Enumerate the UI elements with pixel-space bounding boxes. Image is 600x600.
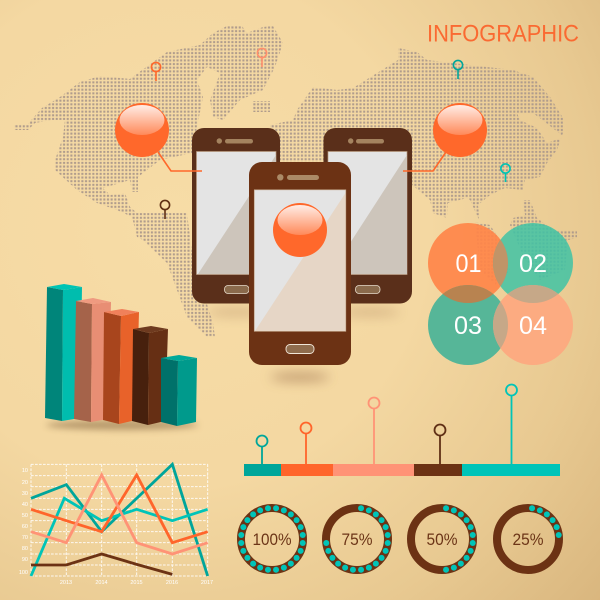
title: INFOGRAPHIC: [427, 20, 579, 48]
chart grid: [31, 464, 208, 576]
donut: 100%: [238, 505, 306, 573]
numbered circles: 01: [456, 250, 482, 278]
numbered circles: [428, 223, 573, 365]
dotted world map: [14, 26, 577, 337]
line chart: [19, 464, 213, 586]
donut: 25%: 25%: [512, 531, 544, 549]
pin: brown: [160, 200, 170, 219]
numbered circles: 02: [519, 250, 547, 278]
donut: 50%: [411, 505, 476, 573]
chart y labels: 100: [19, 570, 28, 576]
phone: left: [192, 128, 280, 304]
connector: left: [158, 152, 202, 171]
glossy ball: left: [115, 103, 169, 157]
phone: right: [324, 128, 412, 304]
chart y labels: 10: [22, 468, 28, 474]
chart y labels: 90: [22, 557, 28, 563]
chart x labels: 2017: [201, 580, 213, 586]
pin: orange: [151, 62, 161, 81]
chart lines: [31, 464, 208, 576]
pin: teal: [453, 60, 463, 79]
chart y labels: [19, 468, 28, 576]
numbered circles: 04: [519, 312, 547, 340]
3D bar chart: [45, 284, 198, 430]
chart x labels: 2016: [166, 580, 178, 586]
phone shadow: centre: [270, 373, 330, 381]
chart x labels: [60, 580, 213, 586]
donut: 75%: 75%: [341, 531, 373, 549]
donut: 25%: [497, 505, 562, 570]
phone shadows: [206, 308, 400, 316]
pin: salmon: [257, 48, 267, 67]
glossy ball: centre: [273, 203, 327, 257]
phone: centre: [249, 162, 351, 365]
connector: right: [403, 152, 446, 171]
chart y labels: 20: [22, 480, 28, 486]
chart x labels: 2014: [95, 580, 108, 586]
donut: 75%: [323, 505, 391, 573]
chart y labels: 80: [22, 546, 28, 552]
timeline with pins: [244, 384, 560, 476]
pin: turquoise: [501, 164, 510, 182]
numbered circles: 03: [454, 312, 482, 340]
chart y labels: 50: [22, 513, 28, 519]
chart x labels: 2013: [60, 580, 72, 586]
donut: 50%: 50%: [426, 531, 458, 549]
chart y labels: 60: [22, 524, 28, 530]
chart y labels: 40: [22, 502, 28, 508]
donut: 100%: 100%: [252, 531, 292, 549]
chart y labels: 70: [22, 535, 28, 541]
chart x labels: 2015: [130, 580, 143, 586]
glossy ball: right: [433, 103, 487, 157]
chart y labels: 30: [22, 491, 28, 497]
